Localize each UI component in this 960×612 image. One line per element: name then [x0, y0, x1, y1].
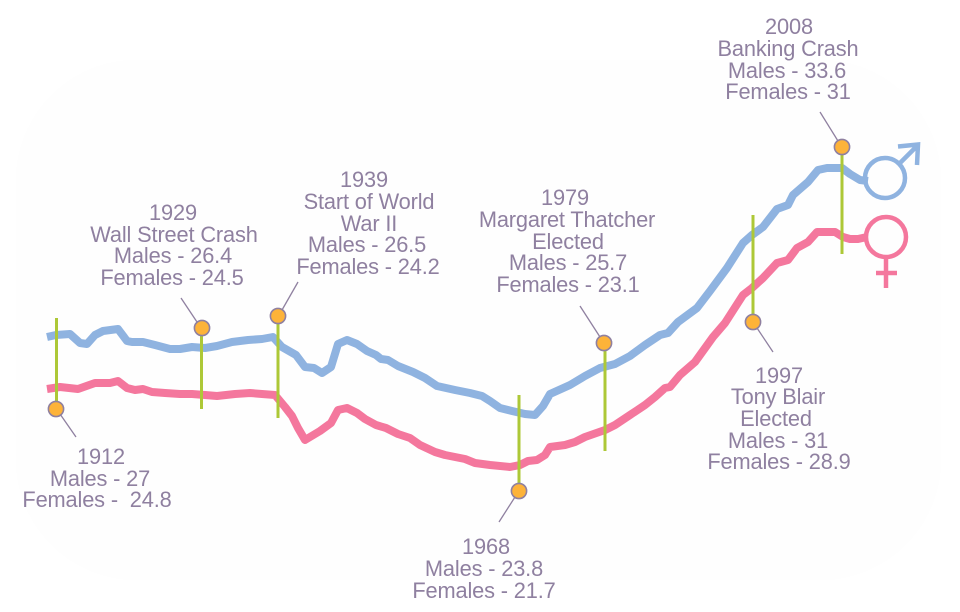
icon: female symbol	[866, 217, 906, 288]
callout: 1979: Females - 23.1	[496, 272, 640, 297]
callout: 1979: Margaret Thatcher	[479, 207, 655, 232]
line: male age at marriage	[47, 168, 868, 415]
callout: 1939: Females - 24.2	[296, 254, 440, 279]
callout: 1939: Males - 26.5	[308, 232, 426, 257]
callout: 1939	[270, 167, 440, 418]
callout: 1939: War II	[341, 211, 397, 236]
callout: 2008: 2008	[765, 14, 813, 39]
callout: 1939: 1939	[340, 167, 388, 192]
callout: 1912	[22, 318, 172, 512]
callout: 1979	[479, 185, 655, 451]
callout: 1929: Males - 26.4	[114, 243, 232, 268]
callout: 1997: Elected	[740, 406, 812, 431]
callout: 1979: Males - 25.7	[509, 250, 627, 275]
callout: 1979: Elected	[532, 229, 604, 254]
callout: 1939: Start of World	[304, 189, 434, 214]
callout: 1912: 1912	[77, 444, 125, 469]
line: female age at marriage	[47, 232, 867, 467]
callout: 1968: 1968	[462, 534, 510, 559]
callout: 2008: Males - 33.6	[728, 58, 846, 83]
callout: 1968: Females - 21.7	[412, 578, 556, 603]
callout: 2008	[717, 14, 859, 254]
callout: 2008: Banking Crash	[717, 36, 859, 61]
callout: 1997: Males - 31	[728, 428, 828, 453]
callout: 1929: 1929	[149, 200, 197, 225]
callout: 1968: Males - 23.8	[425, 556, 543, 581]
callout: 1968	[412, 395, 556, 603]
callout: 1979: 1979	[541, 185, 589, 210]
callout: 1997: Tony Blair	[731, 384, 825, 409]
callout: 1997: 1997	[755, 363, 803, 388]
callout: 1912: Females - 24.8	[22, 487, 172, 512]
callout: 1997	[707, 215, 851, 474]
callout: 2008: Females - 31	[725, 79, 851, 104]
icon: male symbol	[865, 144, 918, 198]
callout: 1929: Females - 24.5	[100, 265, 244, 290]
callout: 1929: Wall Street Crash	[90, 222, 258, 247]
callout: 1997: Females - 28.9	[707, 449, 851, 474]
callout: 1929	[90, 200, 258, 409]
callout: 1912: Males - 27	[50, 466, 150, 491]
